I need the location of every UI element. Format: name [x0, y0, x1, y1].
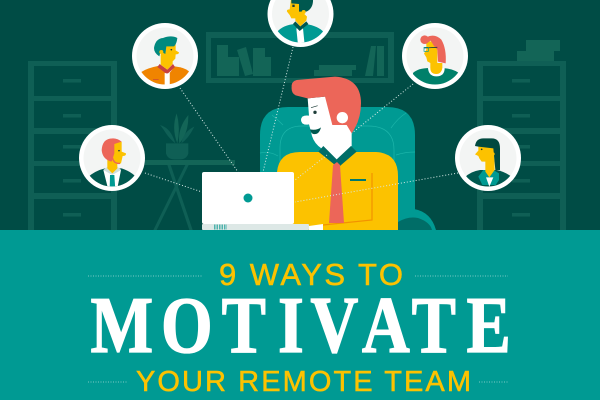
background: dark office wall [0, 0, 600, 230]
title line: 9 ways to: 9 WAYS TO [219, 257, 403, 292]
wall bookshelf [206, 32, 394, 83]
dotted connector lines [145, 47, 458, 202]
title dotted rules [88, 276, 508, 382]
right filing cabinet with stacked boxes [477, 40, 566, 230]
shirt [277, 152, 398, 230]
laptop [202, 172, 309, 230]
avatar: woman with dark hair and teal blazer [455, 125, 521, 192]
title line: your remote team: YOUR REMOTE TEAM [136, 366, 471, 398]
tie [329, 162, 344, 223]
smile [310, 127, 321, 134]
ear [337, 112, 348, 123]
avatar: man with teal hair and orange jacket [132, 23, 198, 89]
avatar: woman with red hair and glasses [402, 23, 468, 90]
face and neck [301, 97, 352, 160]
head [292, 77, 361, 167]
title line: motivate: MOTIVATE [90, 280, 511, 369]
title band [0, 230, 600, 400]
side table with potted plant [145, 113, 235, 230]
left filing cabinet [28, 61, 117, 230]
hair [292, 77, 361, 133]
collar [318, 146, 357, 167]
shirt pocket [323, 173, 372, 225]
main character: man in yellow shirt [277, 77, 398, 230]
avatar: top centre man [268, 0, 334, 47]
hand [309, 224, 323, 230]
eye and brow [313, 111, 317, 114]
avatar: man with red hair and teal tie [79, 125, 145, 192]
armchair [260, 107, 436, 230]
